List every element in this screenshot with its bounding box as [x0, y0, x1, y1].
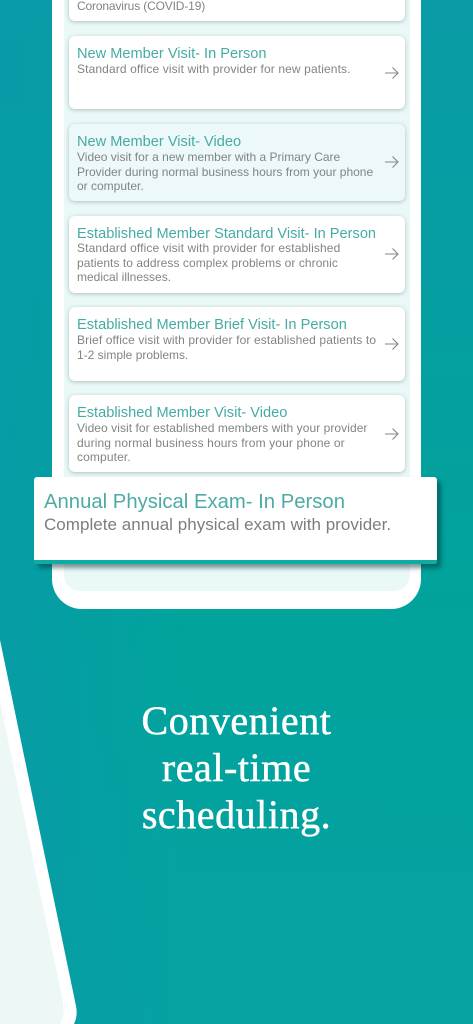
headline: Convenient: [142, 698, 331, 743]
card: new member video: [69, 124, 405, 201]
description: established video: Video visit for established members with your provider: [77, 421, 367, 435]
tilted second phone: [0, 640, 77, 1024]
highlighted card: annual physical exam: [34, 477, 437, 564]
headline: real-time: [162, 745, 311, 790]
description: established standard: medical illnesses.: [77, 270, 171, 284]
description: new member video: or computer.: [77, 179, 144, 193]
description: established standard: [77, 241, 340, 284]
card: established brief in person: [69, 307, 405, 381]
phone frame: [52, 0, 421, 609]
description: established video: computer.: [77, 450, 131, 464]
description: new member video: Provider during normal business hours from your phone: [77, 165, 373, 179]
card: coronavirus: [69, 0, 405, 21]
description: established brief: 1-2 simple problems.: [77, 348, 188, 362]
description: established video: during normal business hours from your phone or: [77, 436, 345, 450]
headline: scheduling.: [142, 792, 331, 837]
arrow: [385, 338, 399, 350]
title: new member video: New Member Visit- Video: [77, 134, 241, 150]
description: annual physical exam: Complete annual physical exam with provider.: [44, 515, 391, 534]
description: new member in person: Standard office visit with provider for new patients.: [77, 62, 351, 76]
description: new member video: Video visit for a new member with a Primary Care: [77, 150, 340, 164]
description: established standard: Standard office visit with provider for established: [77, 241, 340, 255]
description: established brief: [77, 333, 376, 362]
phone screen: [64, 0, 410, 591]
arrow: [385, 248, 399, 260]
card: established standard in person: [69, 216, 405, 293]
phone frame edge: [0, 640, 77, 1024]
card: established video: [69, 395, 405, 472]
card: new member in person: [69, 36, 405, 109]
arrow: [385, 428, 399, 440]
title: new member in person: New Member Visit- In Person: [77, 46, 267, 62]
title: annual physical exam: Annual Physical Exam- In Person: [44, 491, 345, 513]
description: established standard: patients to address complex problems or chronic: [77, 256, 338, 270]
description: established video: [77, 421, 368, 464]
phone screen edge: [0, 702, 64, 1024]
title: established video: Established Member Visit- Video: [77, 405, 287, 421]
description: new member video: [77, 150, 373, 193]
title: established brief: Established Member Brief Visit- In Person: [77, 317, 347, 333]
title: established standard: Established Member Standard Visit- In Person: [77, 226, 376, 242]
teal base strip: [34, 560, 437, 564]
headline: [142, 698, 331, 837]
description: established brief: Brief office visit with provider for established patients to: [77, 333, 376, 347]
arrow: [385, 156, 399, 168]
arrow: [385, 67, 399, 79]
